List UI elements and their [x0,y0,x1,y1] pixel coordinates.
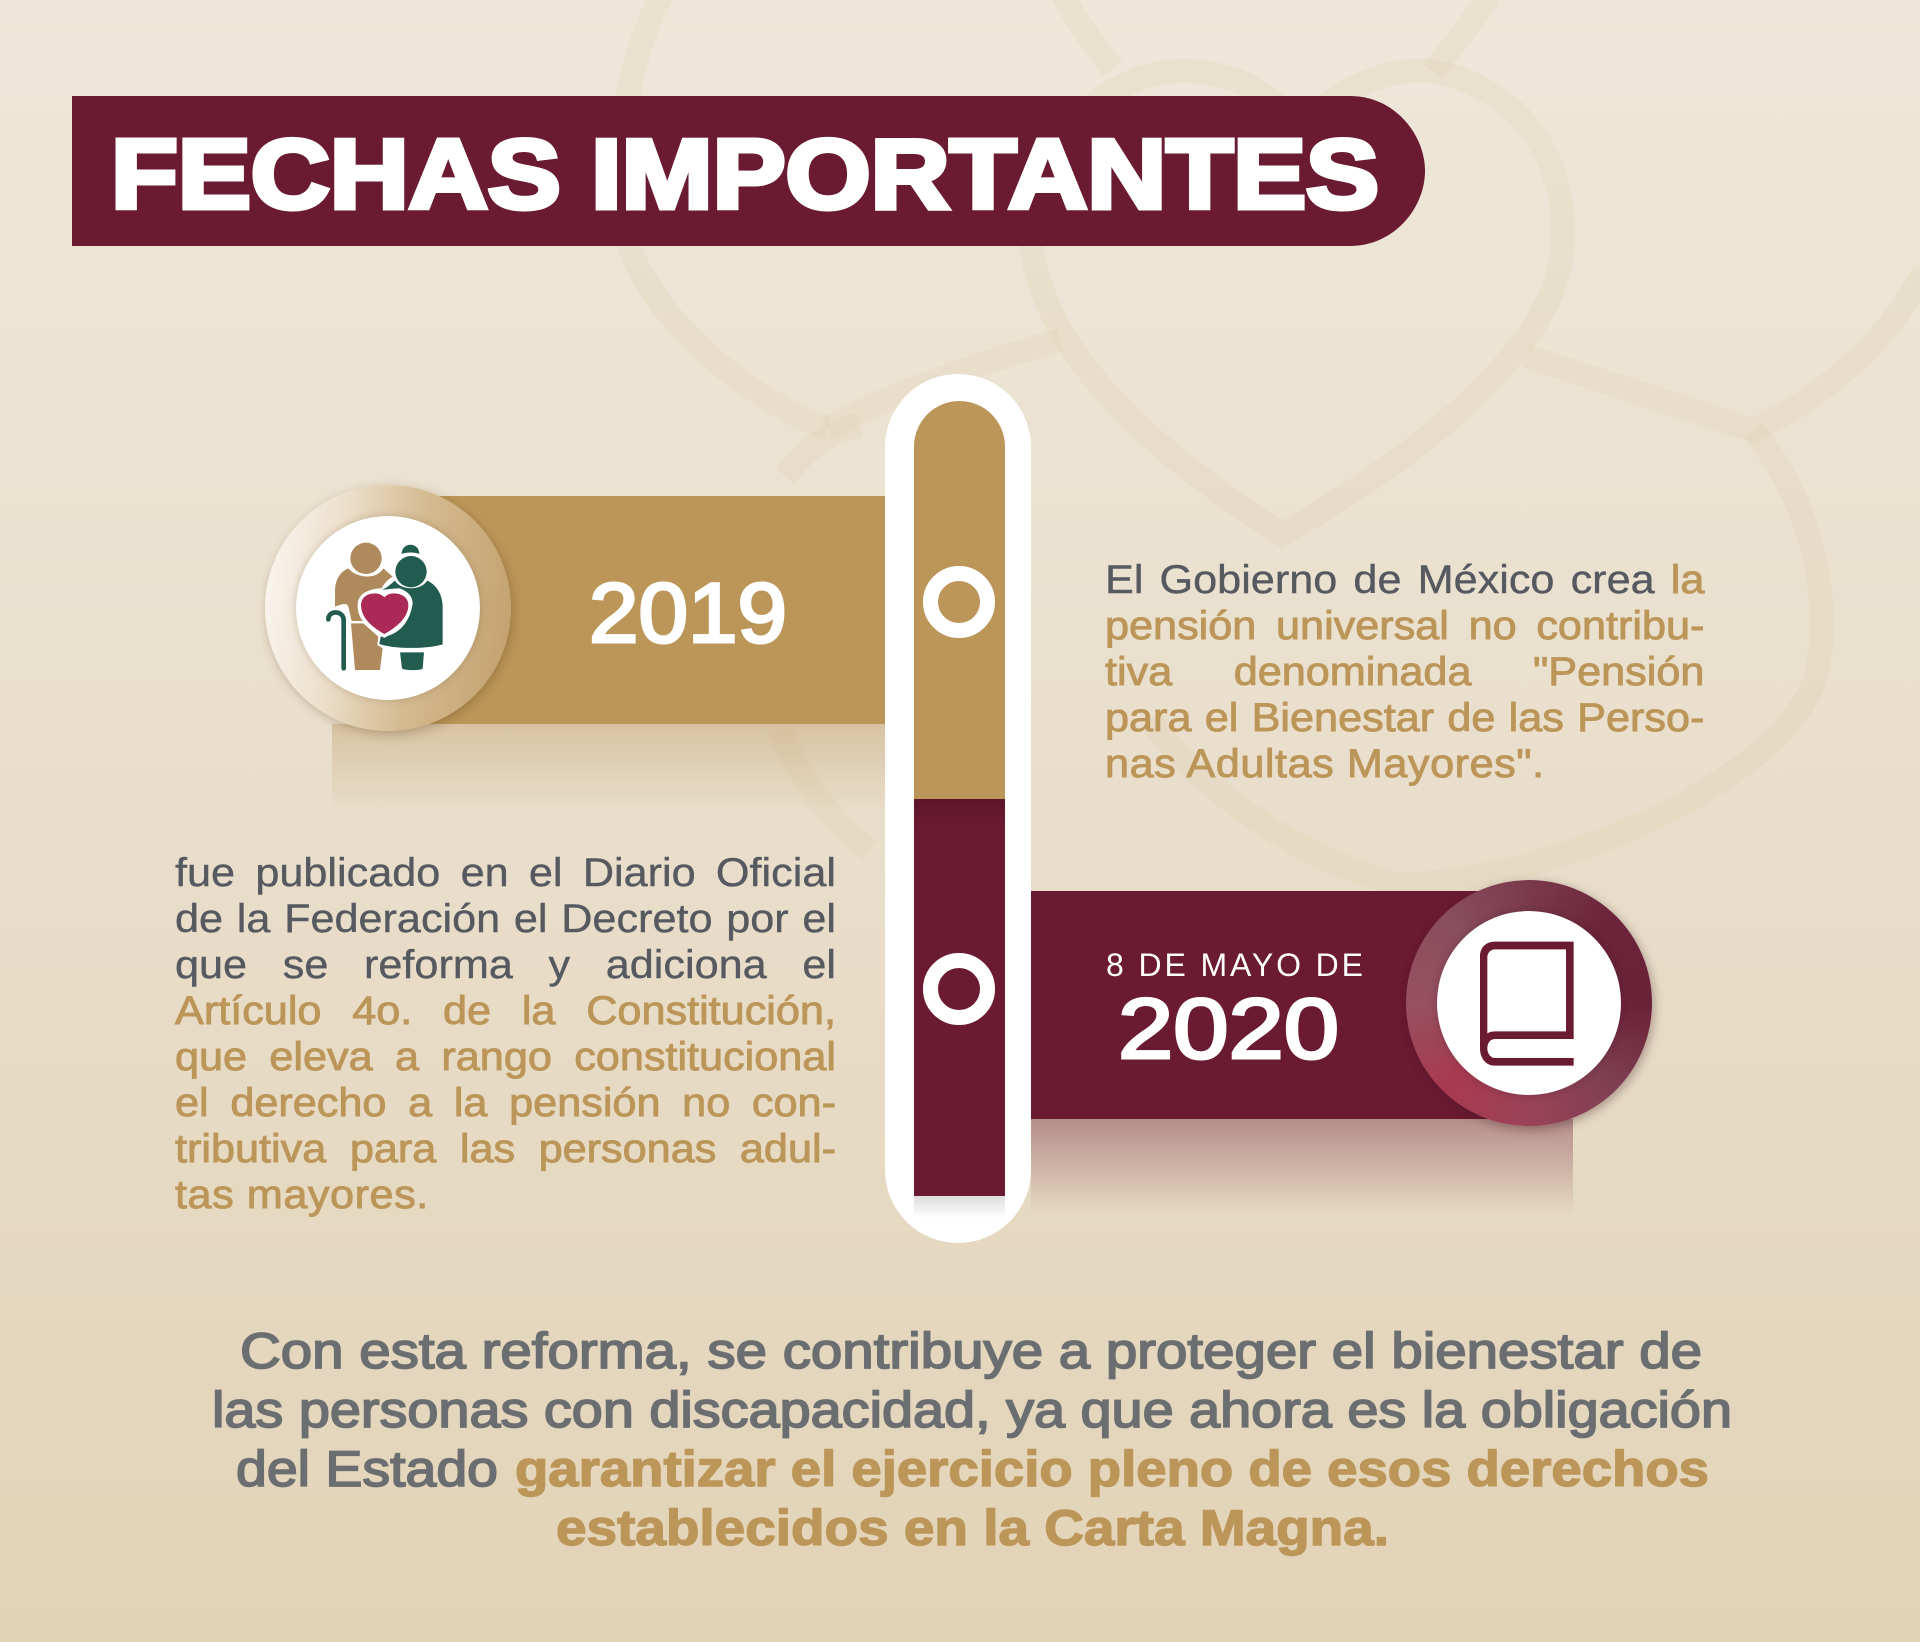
text block: 2019 description: para el Bienestar de las Perso- [1105,696,1704,740]
text block: 2020 description: que se reforma y adiciona el [175,943,836,987]
shadow under gold bar [332,724,885,814]
date 8 de mayo de 2020: 8 DE MAYO DE [1106,947,1363,983]
text block: 2020 description: tas mayores. [175,1173,429,1217]
gold bar 2019 [388,496,885,724]
text block: 2020 description: Artículo 4o. de la Constitución, [175,989,836,1033]
badge: book [1406,880,1652,1126]
text block: 2020 description: tributiva para las personas adul- [175,1127,836,1171]
timeline marker 2020 [923,953,995,1025]
maroon bar 2020 [1031,891,1529,1119]
timeline maroon segment [914,799,1005,1196]
year 2019: 2019 [589,566,787,660]
closing statement: del Estado [236,1441,498,1497]
timeline marker 2019 [923,566,995,638]
text block: 2019 description: El Gobierno de México crea la [1105,558,1704,602]
closing statement: garantizar el ejercicio pleno de esos derechos [515,1441,1709,1497]
badge white disc [1437,911,1621,1095]
text block: 2020 description: fue publicado en el Diario Oficial [175,851,836,895]
text block: 2020 description: de la Federación el Decreto por el [175,897,836,941]
badge: elderly couple [265,485,511,731]
closing statement: las personas con discapacidad, ya que ahora es la obligación [212,1382,1732,1438]
title banner [72,96,1425,246]
closing statement: Con esta reforma, se contribuye a proteger el bienestar de [240,1323,1702,1379]
text block: 2019 description: pensión universal no contribu- [1105,604,1704,648]
timeline end shadow [914,1196,1005,1218]
badge white disc [296,516,480,700]
shadow under maroon bar [1031,1119,1573,1214]
closing statement: establecidos en la Carta Magna. [556,1500,1389,1556]
date 8 de mayo de 2020: 2020 [1118,982,1339,1077]
timeline gold segment [914,401,1005,799]
title banner: FECHAS IMPORTANTES [111,119,1379,229]
date 8 de mayo de 2020 [1106,947,1363,1077]
text block: 2020 description: que eleva a rango constitucional [175,1035,836,1079]
text block: 2020 description: el derecho a la pensión no con- [175,1081,836,1125]
text block: 2019 description: tiva denominada "Pensión [1105,650,1704,694]
text block: 2019 description: nas Adultas Mayores". [1105,742,1545,786]
text block: 2020 description [174,851,836,1217]
timeline pill [885,374,1031,1243]
text block: 2019 description [1105,558,1705,786]
